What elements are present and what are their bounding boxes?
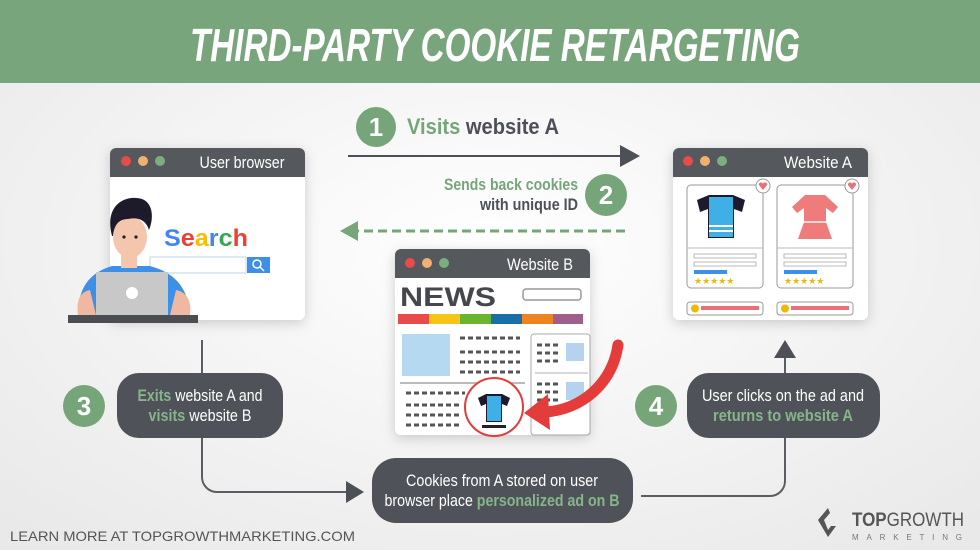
step 4: User clicks on the ad and (702, 386, 864, 405)
bottom box: personalized ad (372, 458, 633, 523)
step 3: visits website B (148, 406, 252, 425)
step 3 (63, 373, 283, 438)
step 2 label: Sends back cookies (444, 175, 578, 194)
search logo: Search (164, 225, 248, 252)
panel: website A (673, 148, 868, 320)
step 1 label: Visits website A (407, 114, 559, 139)
panel: user browser: User browser (200, 153, 285, 172)
panel: website A: Website A (784, 153, 853, 172)
logo (818, 508, 964, 542)
step 2 label: with unique ID (479, 195, 578, 214)
bottom box: personalized ad: Cookies from A stored on user (406, 471, 598, 490)
product card 2: ★★★★★ (784, 276, 824, 286)
step 2 label (444, 174, 627, 216)
icon: person with laptop (68, 198, 198, 323)
arrow: to website A (348, 145, 640, 167)
step 3: Exits website A and (138, 386, 262, 405)
step 4: returns to website A (713, 406, 853, 425)
footer text: LEARN MORE AT TOPGROWTHMARKETING.COM (10, 528, 355, 544)
step 4: 4 (649, 391, 664, 421)
logo: TOPGROWTH (852, 510, 964, 531)
ad on website B (465, 378, 523, 436)
product card 1: ★★★★★ (694, 276, 734, 286)
panel: user browser (68, 148, 305, 323)
bottom box: personalized ad: browser place personalized ad on B (384, 491, 620, 510)
panel: website B: Website B (507, 255, 573, 274)
step 4 (635, 373, 880, 438)
panel: website B (395, 249, 590, 436)
product card 2 (777, 179, 859, 288)
dashed arrow: cookies back (340, 221, 625, 241)
flow lines (202, 340, 796, 503)
arrow: red curve to ad (524, 345, 618, 430)
title band (0, 0, 980, 83)
panel: website B: NEWS (400, 282, 496, 312)
step 1 label (356, 107, 559, 147)
step 2 label: 2 (599, 180, 613, 210)
logo: MARKETING (852, 533, 962, 542)
step 1 label: 1 (369, 112, 383, 142)
product card 1 (687, 179, 770, 288)
step 3: 3 (77, 391, 91, 421)
